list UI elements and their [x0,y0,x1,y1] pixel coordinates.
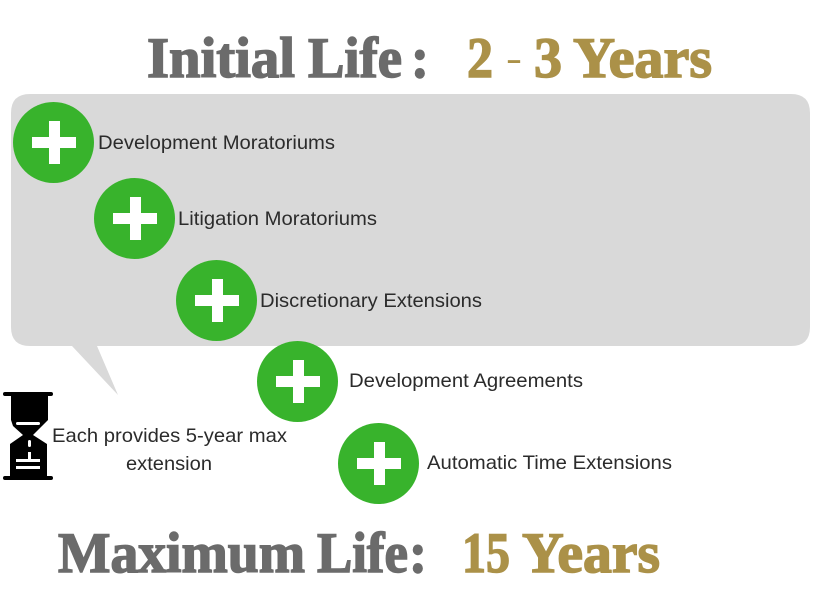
title: maximum life: Maximum [58,522,305,585]
title: initial life: : [411,27,429,90]
title: initial life: 2 [467,27,493,90]
title: maximum life: Life [317,522,408,585]
panel: grey speech bubble [11,94,810,395]
text: each provides note: extension [126,453,212,475]
title: initial life [147,25,712,90]
title: initial life: 3 [534,27,562,90]
text: each provides note [52,425,287,475]
item: litigation moratoriums: Litigation Moratoriums [178,208,377,230]
item: litigation moratoriums [94,178,377,259]
icon: hourglass [3,392,53,480]
title: maximum life [58,522,660,585]
title: maximum life: : [409,522,427,585]
item: development moratoriums [13,102,335,183]
item: development agreements: Development Agreements [349,370,583,392]
title: initial life: Life [308,27,402,90]
title: initial life: – [508,25,520,88]
text: each provides note: Each provides 5-year max [52,425,287,447]
title: initial life: Years [573,27,712,90]
item: discretionary extensions [176,260,482,341]
item: automatic time extensions: Automatic Time Extensions [427,452,672,474]
title: maximum life: 15 [462,522,510,585]
item: development agreements [257,341,583,422]
item: automatic time extensions [338,423,672,504]
title: maximum life: Years [522,522,660,585]
item: discretionary extensions: Discretionary Extensions [260,290,482,312]
item: development moratoriums: Development Moratoriums [98,132,335,154]
title: initial life: Initial [147,27,295,90]
